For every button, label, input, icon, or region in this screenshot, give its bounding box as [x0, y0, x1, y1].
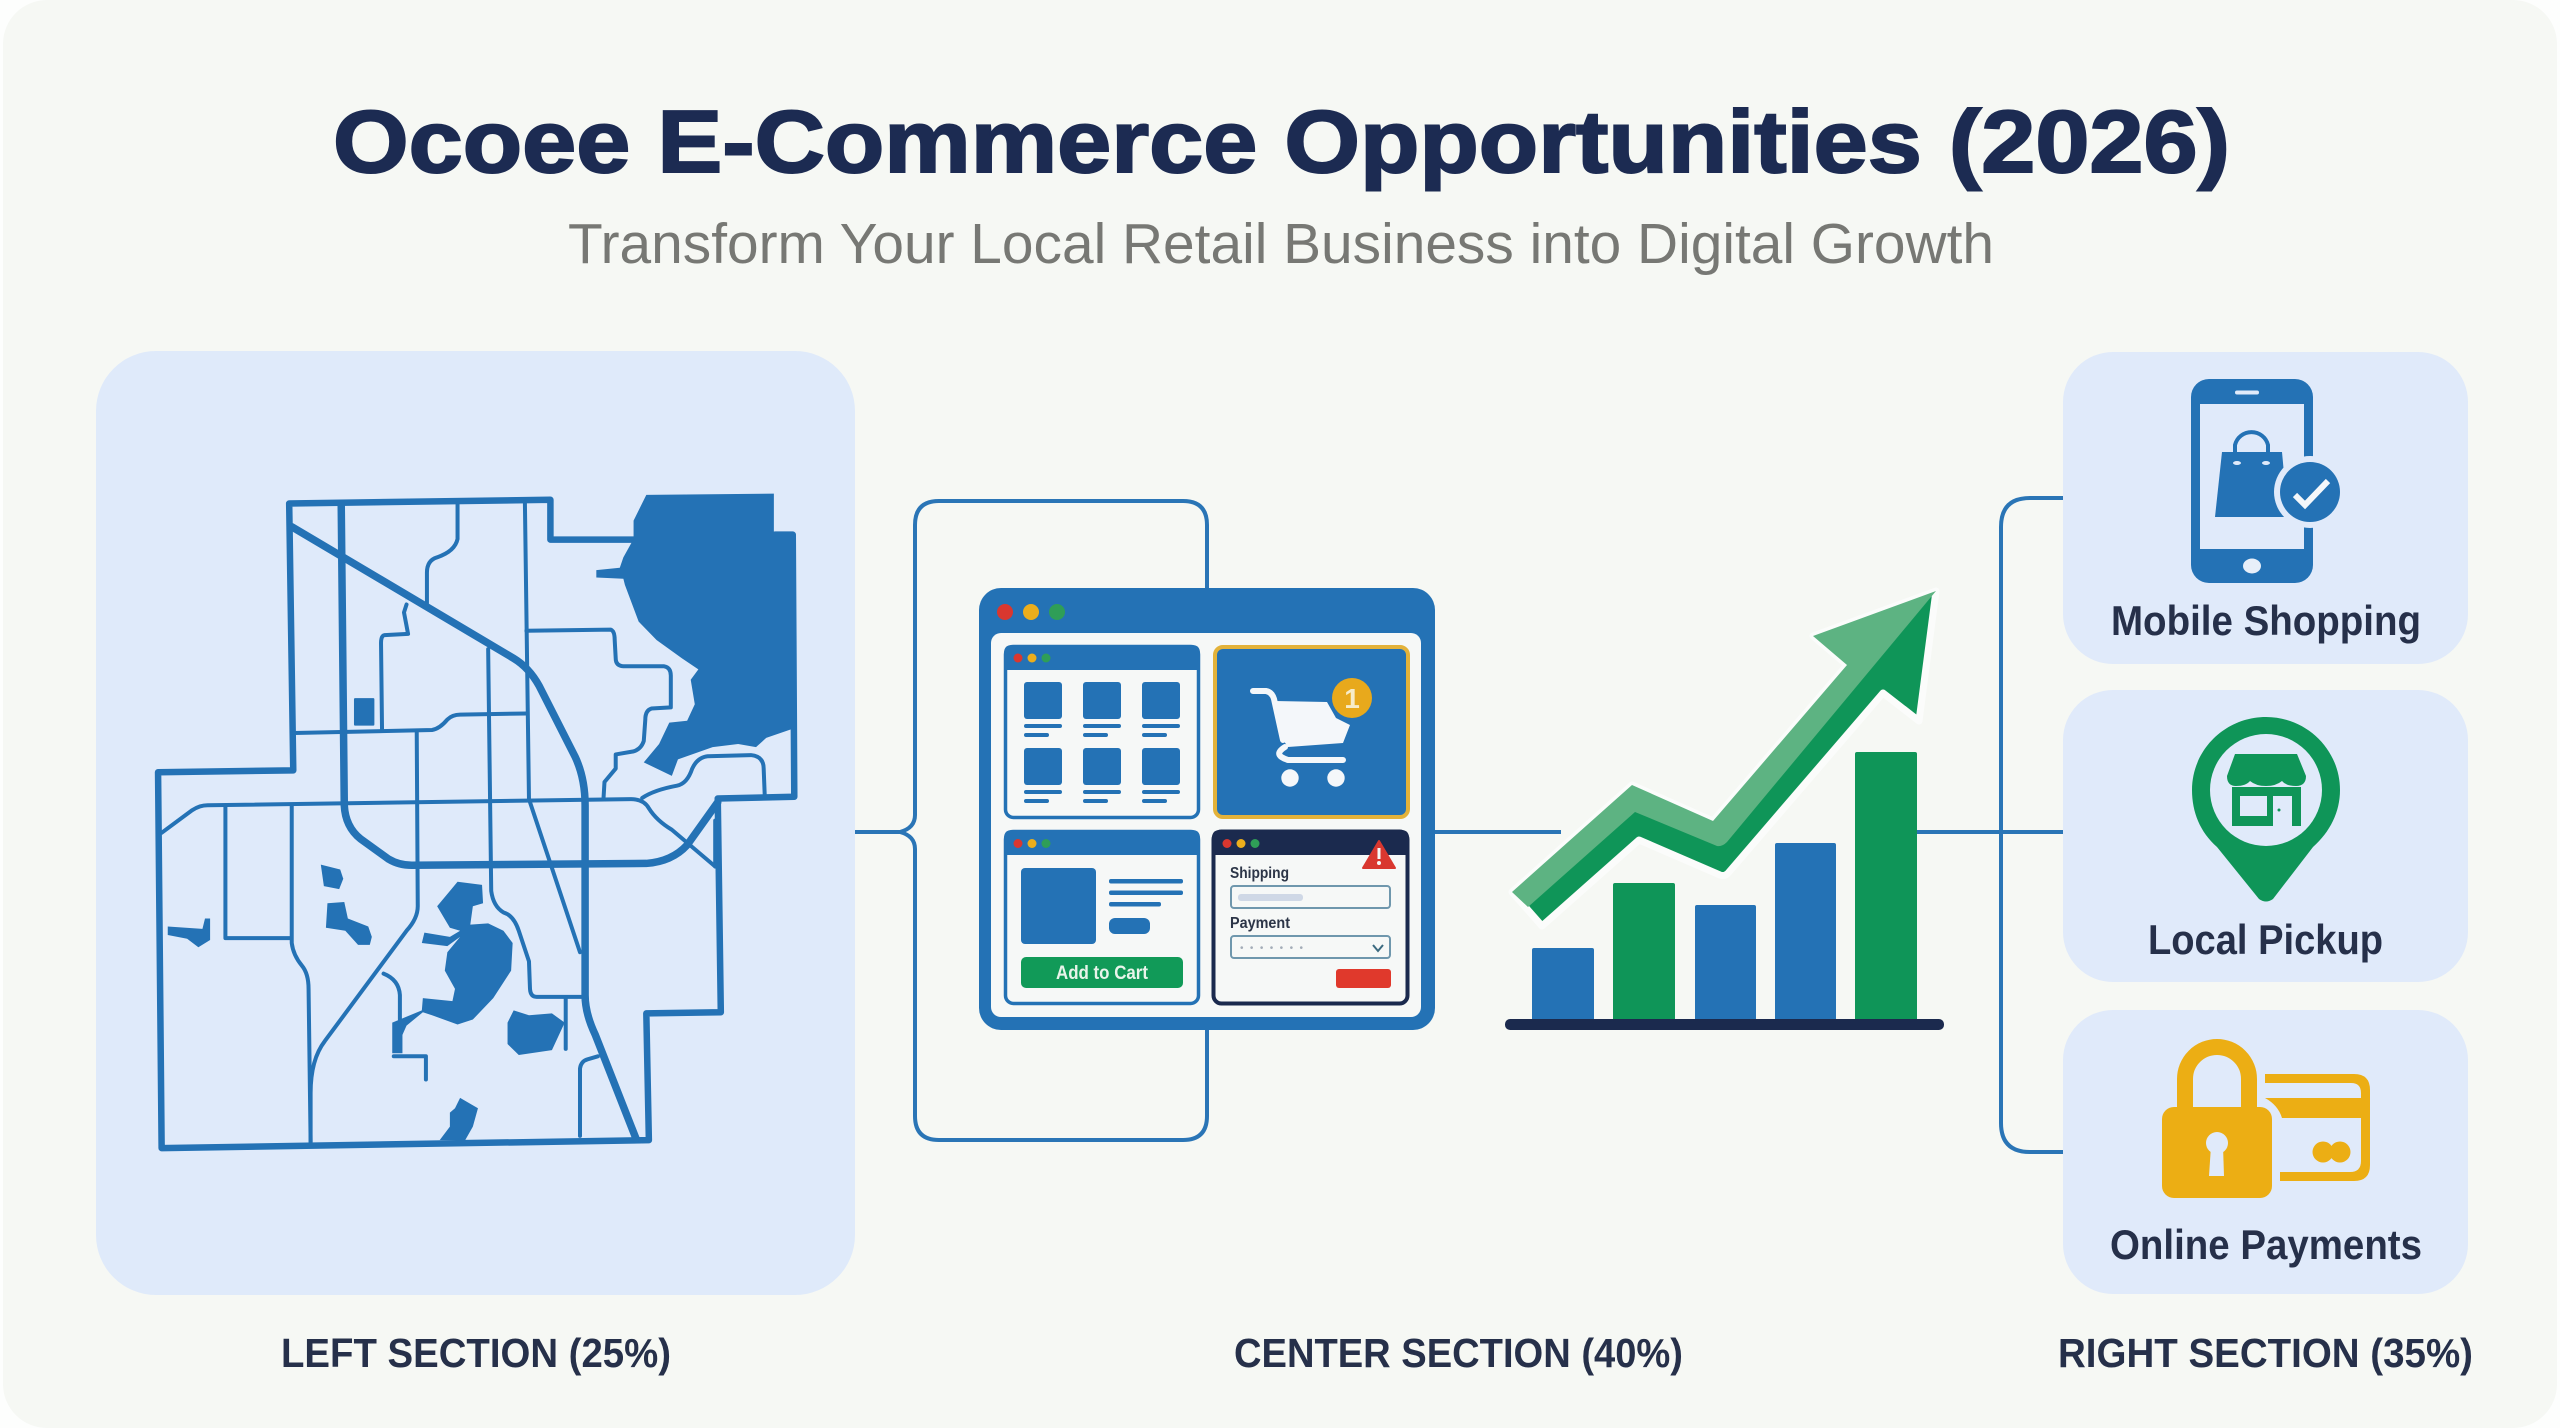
- connector: center to chart: [1430, 830, 1561, 834]
- window: product page: [1004, 830, 1200, 1004]
- card: Local Pickup: [2063, 690, 2468, 982]
- chart baseline: [1505, 1019, 1944, 1030]
- window: checkout form: Shipping: [1230, 865, 1289, 882]
- label: Online Payments: [2110, 1221, 2422, 1268]
- icon: phone with bag: [2191, 379, 2346, 583]
- connector: chart to right cards: [1917, 498, 2063, 1152]
- label: left section: LEFT SECTION (25%): [281, 1330, 671, 1376]
- main roads: [292, 504, 718, 1139]
- label: center section: CENTER SECTION (40%): [1234, 1330, 1683, 1376]
- add to cart button: [1021, 957, 1183, 988]
- panel: Ocoee map: [96, 351, 855, 1295]
- lakes: [168, 494, 793, 1140]
- label: right section: RIGHT SECTION (35%): [2058, 1330, 2473, 1376]
- browser mockup: [979, 588, 1435, 1030]
- map outline: [158, 500, 794, 1148]
- growth chart: [1505, 591, 1944, 1030]
- cart badge: [1332, 678, 1372, 718]
- browser window dots: [997, 604, 1065, 620]
- label: Mobile Shopping: [2111, 597, 2421, 644]
- map of Ocoee: [158, 494, 794, 1148]
- growth arrow: [1512, 591, 1936, 926]
- card: Mobile Shopping: [2063, 352, 2468, 664]
- window: product grid: [1004, 645, 1200, 818]
- minor roads: [162, 502, 765, 1142]
- cart badge: 1: [1344, 683, 1360, 714]
- chart bars: [1532, 752, 1917, 1022]
- label: Local Pickup: [2148, 916, 2383, 963]
- window: checkout form: • • • • • • •: [1240, 943, 1303, 954]
- icon: warning triangle: [1363, 841, 1395, 868]
- title: Ocoee E-Commerce Opportunities (2026): [333, 92, 2230, 191]
- card: Online Payments: [2063, 1010, 2468, 1294]
- icon: lock and credit card: [2162, 1047, 2370, 1198]
- window: checkout form: Payment: [1230, 915, 1291, 932]
- connector: left panel to center bracket: [855, 501, 1207, 1140]
- window: checkout form: [1212, 830, 1409, 1004]
- add to cart button: Add to Cart: [1056, 963, 1149, 984]
- icon: cart: [1253, 691, 1350, 787]
- icon: store location pin: [2192, 717, 2340, 902]
- subtitle: Transform Your Local Retail Business into Digital Growth: [568, 212, 1994, 276]
- window: shopping cart: [1215, 647, 1408, 817]
